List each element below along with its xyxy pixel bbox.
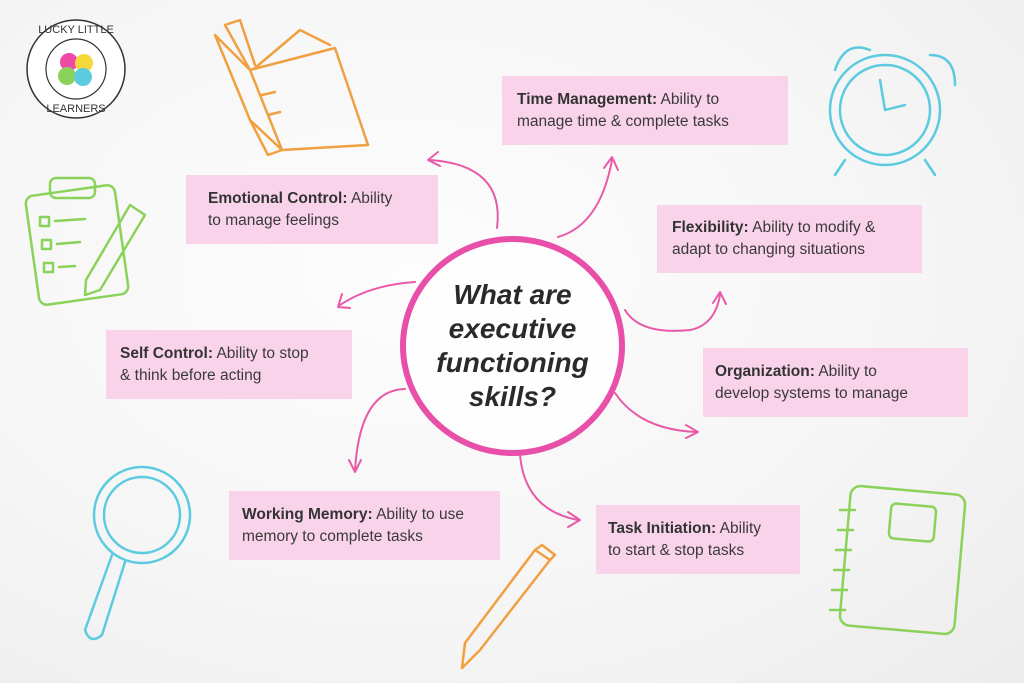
icon: notebook [830, 485, 966, 635]
box: flexibility: adapt to changing situations [672, 241, 865, 258]
box: organization: develop systems to manage [715, 384, 908, 402]
box: working memory: Working Memory: Ability to use [242, 506, 464, 522]
arrows [338, 152, 726, 527]
box: flexibility: Flexibility: Ability to modify & [672, 219, 875, 236]
icon: magnifier [85, 467, 190, 639]
box: emotional control: Emotional Control: Ability [208, 190, 392, 206]
logo [27, 20, 125, 118]
box: emotional control: to manage feelings [208, 212, 339, 228]
box: self control [106, 330, 352, 399]
box: self control: & think before acting [120, 366, 261, 384]
icon: clock [830, 48, 955, 175]
box: working memory [229, 491, 500, 560]
box: task initiation: to start & stop tasks [608, 542, 744, 558]
box: working memory: memory to complete tasks [242, 528, 423, 544]
box: flexibility [657, 205, 922, 273]
center circle heading: executive [449, 313, 576, 344]
icon: book [215, 20, 368, 155]
center circle heading: What are [453, 279, 572, 310]
logo: LEARNERS [46, 103, 106, 115]
center circle heading [400, 236, 625, 456]
box: emotional control [186, 175, 438, 244]
box: time management: Time Management: Ability to [517, 90, 719, 108]
logo: LUCKY LITTLE [38, 24, 114, 36]
center circle heading: skills? [469, 381, 556, 412]
box: organization: Organization: Ability to [715, 362, 877, 380]
box: time management [502, 76, 788, 145]
center circle heading: functioning [436, 347, 589, 378]
box: task initiation: Task Initiation: Ability [608, 520, 761, 536]
box: organization [703, 348, 968, 417]
box: time management: manage time & complete tasks [517, 112, 729, 130]
box: task initiation [596, 505, 800, 574]
box: self control: Self Control: Ability to stop [120, 344, 309, 362]
icon: clipboard [25, 178, 145, 306]
icon: pencil [462, 545, 555, 668]
